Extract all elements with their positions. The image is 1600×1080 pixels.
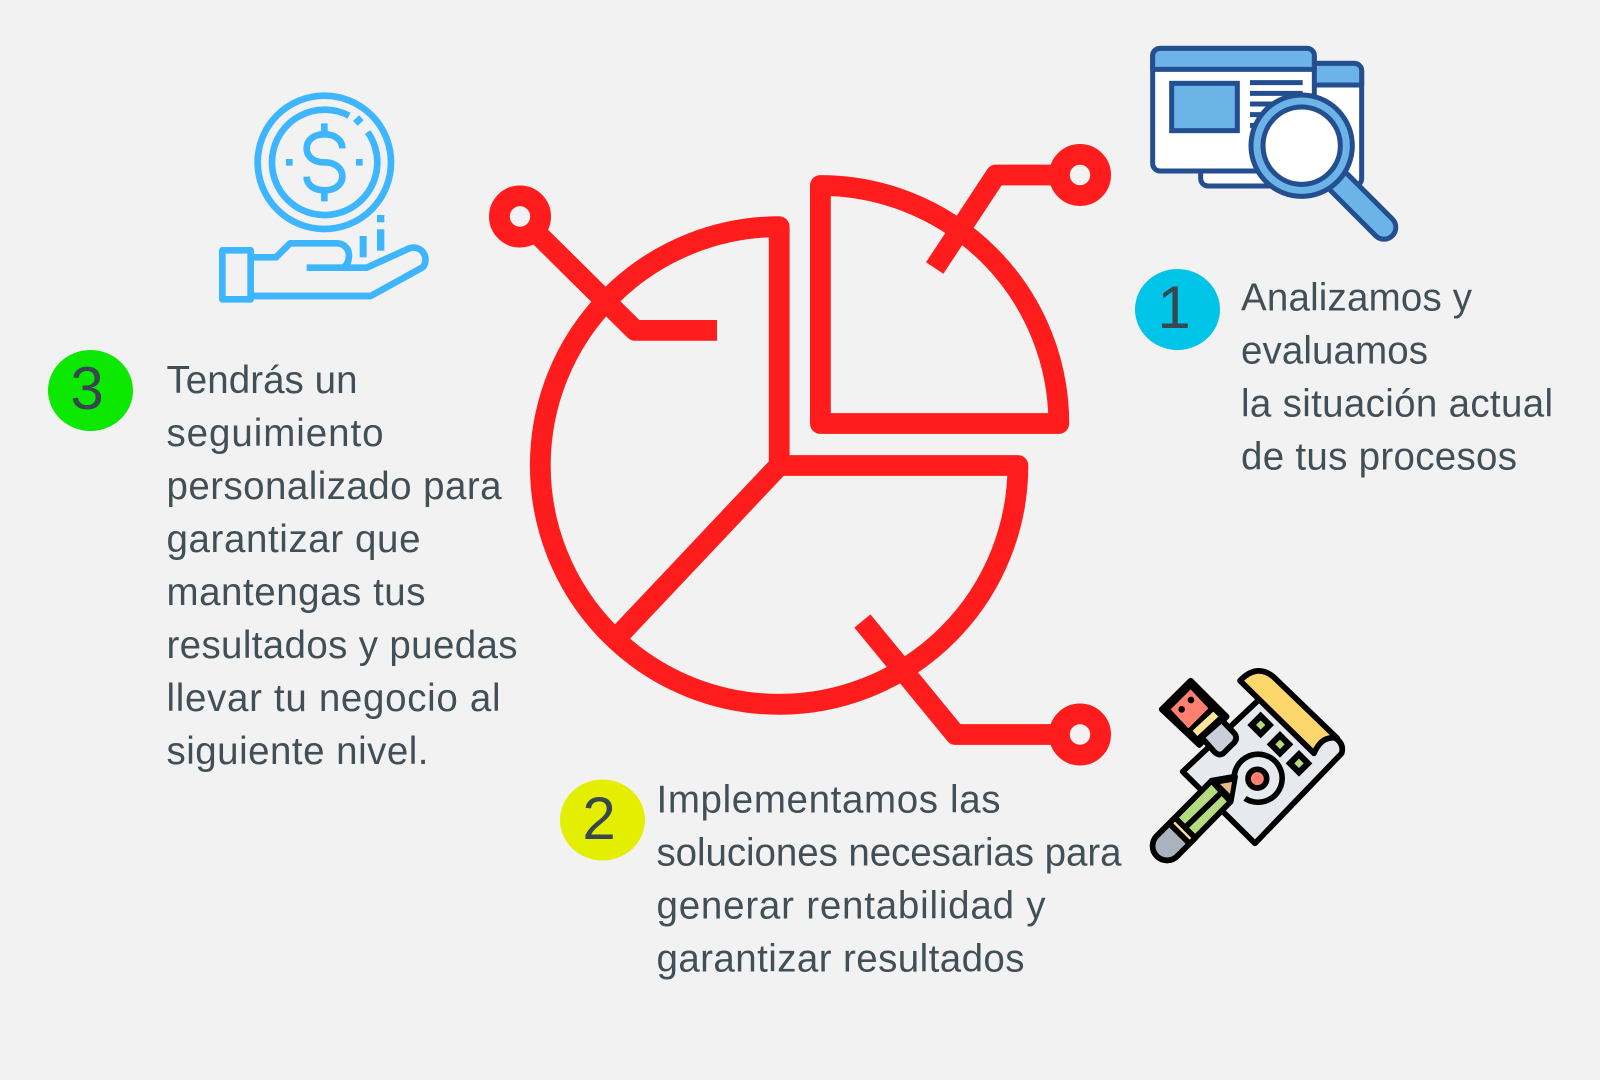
detached upper-right slice (820, 185, 1059, 424)
step 3 text (166, 359, 518, 773)
step 3 text: Tendrás un (166, 359, 358, 402)
icon: web pages with magnifier (1153, 48, 1384, 227)
step 1 text: de tus procesos (1241, 436, 1517, 479)
step 1 text: evaluamos (1241, 330, 1428, 373)
icon: hand holding coin (222, 96, 426, 299)
step 3 text: mantengas tus (166, 571, 426, 614)
step 3 text: siguiente nivel. (166, 730, 428, 773)
step 1 text: la situación actual (1241, 383, 1553, 426)
step 3 badge: 3 (70, 355, 104, 422)
connector to step 1 (935, 154, 1101, 268)
step 2 badge (560, 780, 645, 860)
step 3 text: personalizado para (166, 465, 502, 508)
step 3 text: garantizar que (166, 518, 420, 561)
step 3 text: seguimiento (166, 412, 384, 455)
step 1 text (1241, 277, 1553, 479)
step 3 text: resultados y puedas (166, 624, 518, 667)
central pie chart (499, 154, 1101, 755)
step 2 text: garantizar resultados (656, 938, 1024, 981)
step 2 text (656, 779, 1122, 981)
connector to step 2 (862, 621, 1101, 755)
icon: plan with pencil and marker (1153, 671, 1342, 860)
step 2 text: Implementamos las (656, 779, 1000, 822)
step 1 text: Analizamos y (1241, 277, 1473, 320)
step 1 badge: 1 (1157, 274, 1191, 341)
step 2 text: generar rentabilidad y (656, 885, 1046, 928)
step 2 text: soluciones necesarias para (656, 832, 1122, 875)
step 3 badge (48, 350, 133, 431)
connector to step 3 (499, 196, 717, 330)
step 2 badge: 2 (582, 785, 616, 852)
large pie body (540, 227, 1018, 704)
step 3 text: llevar tu negocio al (166, 677, 500, 720)
step 1 badge (1135, 269, 1220, 350)
